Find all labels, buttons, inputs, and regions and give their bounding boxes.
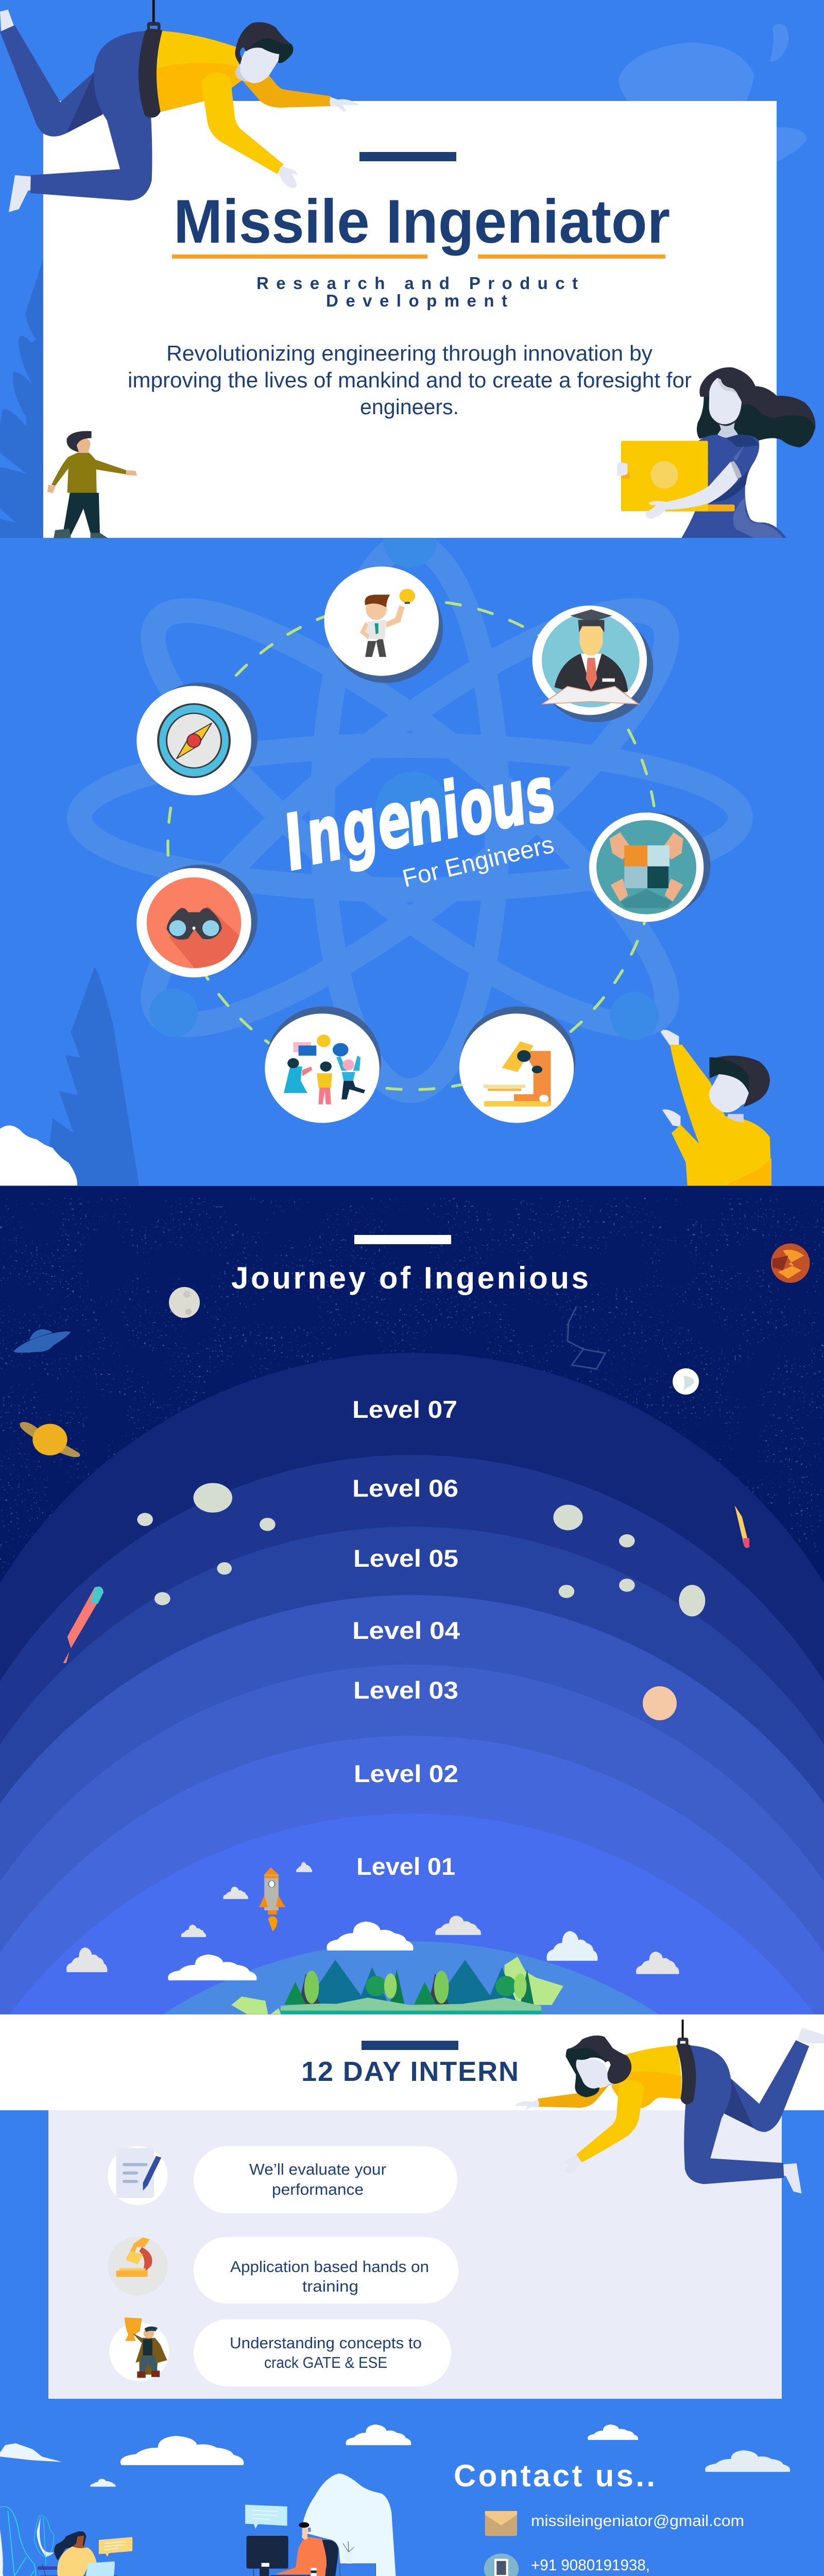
clouds: contact section [0,2425,790,2487]
node: team ideas [265,1006,381,1123]
figure: woman with yellow folder [617,367,815,538]
leaf silhouette [45,967,139,1185]
panel: hero white card [43,101,777,538]
item 3: trophy icon [109,2317,169,2381]
asteroids [137,1483,705,1616]
section background: blue hero [0,0,824,1187]
intro paragraph: engineers. [360,395,459,419]
heading: contact us: Contact us.. [454,2459,655,2493]
item 2: text pill [194,2237,458,2303]
sky layers [0,1353,824,2014]
item 1: text pill: performance [272,2180,364,2198]
bar above journey heading [354,1235,451,1244]
figure: hanging woman [514,2020,824,2194]
title underline [172,255,665,259]
level labels: Level 02 [354,1760,458,1787]
icon: envelope [485,2511,517,2536]
fern left of white panel [0,260,43,538]
section background: space [0,1186,824,2014]
subtitle: Development [326,291,507,310]
level labels [352,1396,460,1880]
panel: internship card [48,2110,782,2399]
constellation [568,1307,606,1369]
rocket [259,1867,285,1931]
item 2: text pill: training [302,2277,358,2295]
item 1: text pill: We’ll evaluate your [249,2160,386,2178]
atom nuclei [149,514,659,1040]
level labels: Level 05 [353,1545,458,1572]
item 1: text pill [194,2146,457,2213]
subtitle [256,274,578,310]
node: compass [136,683,258,795]
saturn [20,1422,80,1457]
item 3: text pill: crack GATE & ESE [264,2353,387,2371]
level labels: Level 04 [352,1617,460,1644]
intro paragraph: improving the lives of mankind and to create a foresight for [128,368,692,392]
level labels: Level 01 [356,1853,455,1880]
item 2: microscope icon [108,2236,168,2296]
level labels: Level 06 [352,1475,458,1502]
item 1: evaluation icon [108,2146,168,2205]
comets [63,1505,749,1663]
illustration: man at desk [219,2473,400,2576]
section background: 12 day intern header [0,2014,824,2110]
level labels: Level 03 [353,1676,458,1704]
subtitle: Research and Product [256,274,578,293]
illustration: woman on bench [0,2506,174,2576]
decorative bar above title [359,152,456,161]
background blobs top right [619,24,806,162]
contact email: missileingeniator@gmail.com [531,2512,744,2530]
item 2: text pill: Application based hands on [230,2258,429,2276]
ufo [13,1329,71,1353]
intro paragraph [128,341,692,419]
level labels: Level 07 [352,1396,457,1423]
section background: blue lower [0,2110,824,2576]
figure: hanging man [0,0,359,212]
node: idea man [324,567,443,683]
peach planet [643,1686,677,1720]
clouds: level 1 sky [66,1862,679,1980]
figure: waving man [661,1030,771,1185]
icon: phone [484,2553,519,2576]
node: graduate [533,606,653,722]
star field [0,1198,824,1713]
node: puzzle [589,812,711,922]
item 3: text pill [194,2319,451,2386]
node: microscope [459,1006,575,1123]
title: Missile Ingeniator [174,187,670,256]
heading: Journey of Ingenious: Journey of Ingenious [231,1261,589,1295]
earth landscape [231,1957,563,2014]
dashed ring [168,600,657,1090]
intro paragraph: Revolutionizing engineering through innovation by [166,341,653,365]
item 3: text pill: Understanding concepts to [230,2334,422,2352]
planets and moons [169,1244,810,1395]
subheading: For Engineers: For Engineers [400,831,557,893]
heading: 12 day intern: 12 DAY INTERN [301,2056,519,2087]
contact phone numbers: +91 9080191938, [531,2556,650,2574]
bar above intern heading [362,2041,458,2050]
node: binoculars [136,865,258,977]
heading: Ingenious: Ingenious [282,748,558,889]
cloud bottom left [0,1126,77,1185]
atom background [79,545,741,1091]
figure: small man [47,431,137,538]
